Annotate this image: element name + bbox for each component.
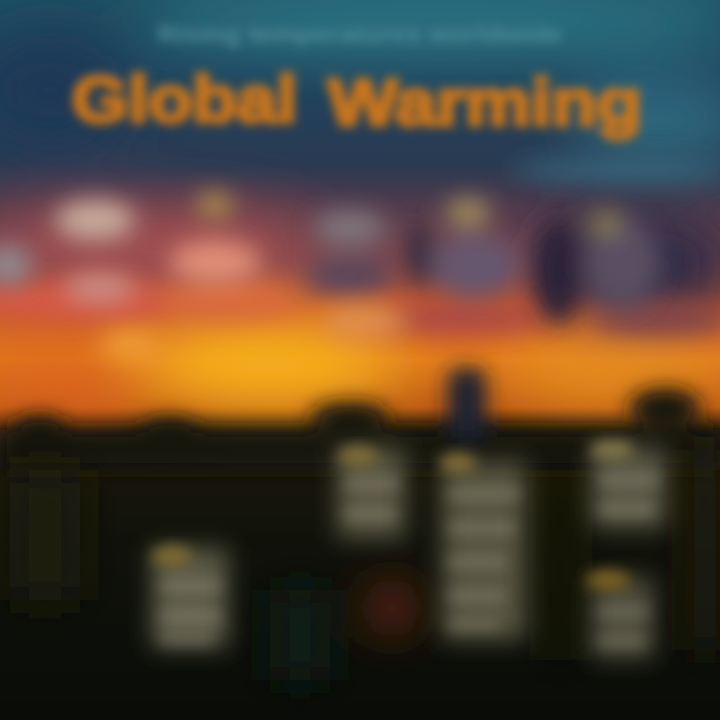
panel: lower right text card xyxy=(586,570,654,658)
subtitle: Rising temperatures worldwide xyxy=(158,21,562,47)
panel: centre text card xyxy=(337,446,405,538)
ground colour variations xyxy=(10,450,720,680)
panel: tall text card xyxy=(440,453,526,640)
title: Warming xyxy=(328,65,642,139)
tree line silhouette and tower xyxy=(0,368,720,470)
panel: upper right text card xyxy=(590,440,666,528)
title xyxy=(72,62,642,139)
clouds and sky infographic panels xyxy=(0,193,660,359)
title: Global xyxy=(72,62,297,136)
panel: lower left text card xyxy=(152,546,228,648)
